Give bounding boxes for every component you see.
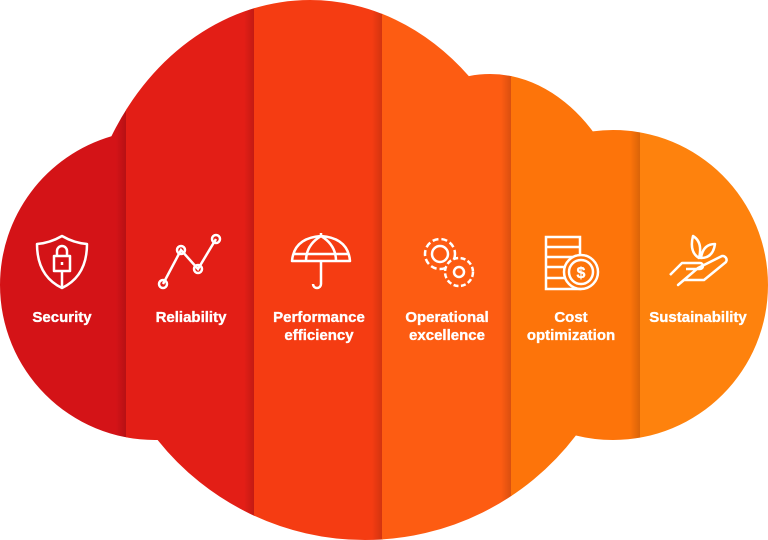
icon: gears xyxy=(425,239,473,286)
label: Security: Security xyxy=(32,309,92,326)
icon: umbrella xyxy=(292,233,350,288)
icon: shield lock xyxy=(37,236,87,288)
label: Reliability: Reliability xyxy=(156,309,227,326)
icon: hand with leaf xyxy=(670,236,727,285)
icon: line chart xyxy=(159,235,220,288)
icon: coins xyxy=(546,237,598,289)
label: Performance efficiency: Performance xyxy=(273,309,365,326)
label: Cost optimization: Cost xyxy=(554,309,588,326)
icon: coins: $ xyxy=(577,265,586,282)
label: Cost optimization: optimization xyxy=(527,327,615,344)
label: Operational excellence: excellence xyxy=(409,327,485,344)
label: Sustainability: Sustainability xyxy=(649,309,747,326)
label: Operational excellence: Operational xyxy=(405,309,489,326)
label: Performance efficiency: efficiency xyxy=(284,327,354,344)
